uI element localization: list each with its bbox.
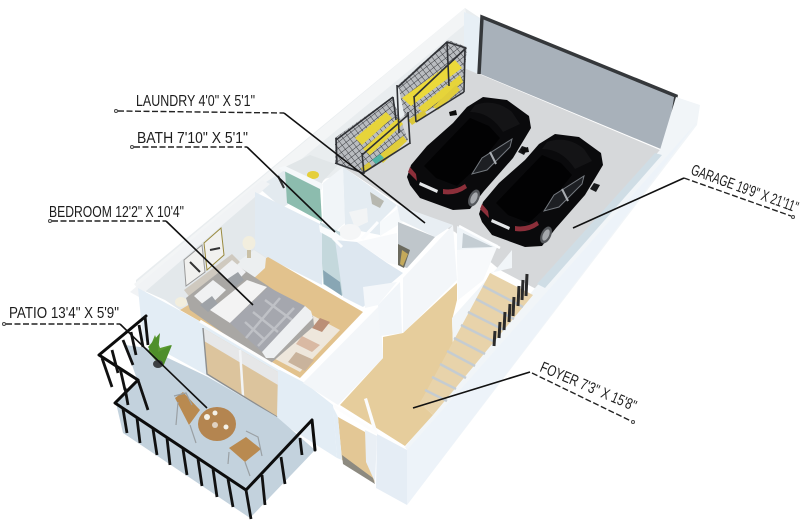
wall between laundry and foyer [403, 225, 457, 333]
label: patio [2, 305, 207, 408]
label: laundry: LAUNDRY 4'0" X 5'1" [136, 93, 255, 110]
label: bedroom [48, 204, 253, 305]
grey patterned blanket [230, 287, 305, 352]
panel: laundry [397, 205, 453, 268]
label: bath: BATH 7'10" X 5'1" [137, 130, 248, 147]
label: bath [130, 130, 335, 232]
chair right [228, 431, 262, 476]
label: garage [573, 162, 800, 228]
panel: garage floor [340, 68, 660, 290]
bolster [262, 306, 313, 358]
car: right [479, 134, 603, 247]
icon: toilet [339, 208, 368, 240]
label: patio: PATIO 13'4" X 5'9" [9, 305, 119, 322]
garage door to foyer [457, 226, 500, 300]
garage side wall [464, 12, 480, 74]
nightstand and lamp [175, 236, 266, 307]
pillows [194, 280, 226, 308]
garage door [478, 17, 676, 152]
left outer wall [136, 8, 480, 290]
chair left [174, 392, 200, 443]
panel: foyer floor [340, 283, 457, 446]
bath door and wall [333, 222, 403, 336]
panel: patio [116, 333, 315, 518]
stairs [420, 273, 533, 415]
stair balusters [494, 274, 527, 346]
label: foyer: FOYER 7'3" X 15'8" [537, 359, 639, 415]
label: bedroom: BEDROOM 12'2" X 10'4" [49, 204, 184, 221]
garage right outer wall [405, 97, 700, 505]
stair side wall [452, 250, 512, 347]
bedroom back wall [138, 192, 268, 310]
garage floor edge [537, 153, 662, 288]
wall between bedroom and closet [255, 192, 322, 285]
label: foyer [413, 359, 639, 424]
shower glass [320, 222, 343, 296]
patio railing [99, 316, 315, 519]
entry door leaf [365, 430, 377, 482]
wall between bedroom and foyer [303, 305, 383, 405]
bed [184, 254, 314, 364]
panel: bathroom [320, 167, 403, 296]
bedroom wall rim [130, 180, 270, 297]
label: laundry [114, 93, 425, 223]
table [198, 407, 236, 441]
rug [220, 282, 340, 372]
bedroom sliding doors and front wall [138, 288, 337, 458]
entry threshold [333, 398, 407, 505]
front wall [376, 434, 407, 505]
panel: closet and shower [258, 155, 338, 222]
wall art [184, 228, 224, 286]
white sheet band [210, 280, 267, 323]
shelving: storage racks [335, 40, 467, 174]
car: left [407, 97, 531, 210]
building floor plan [99, 8, 700, 519]
panel: bedroom wood floor [180, 257, 363, 378]
icon: plant [148, 333, 172, 368]
